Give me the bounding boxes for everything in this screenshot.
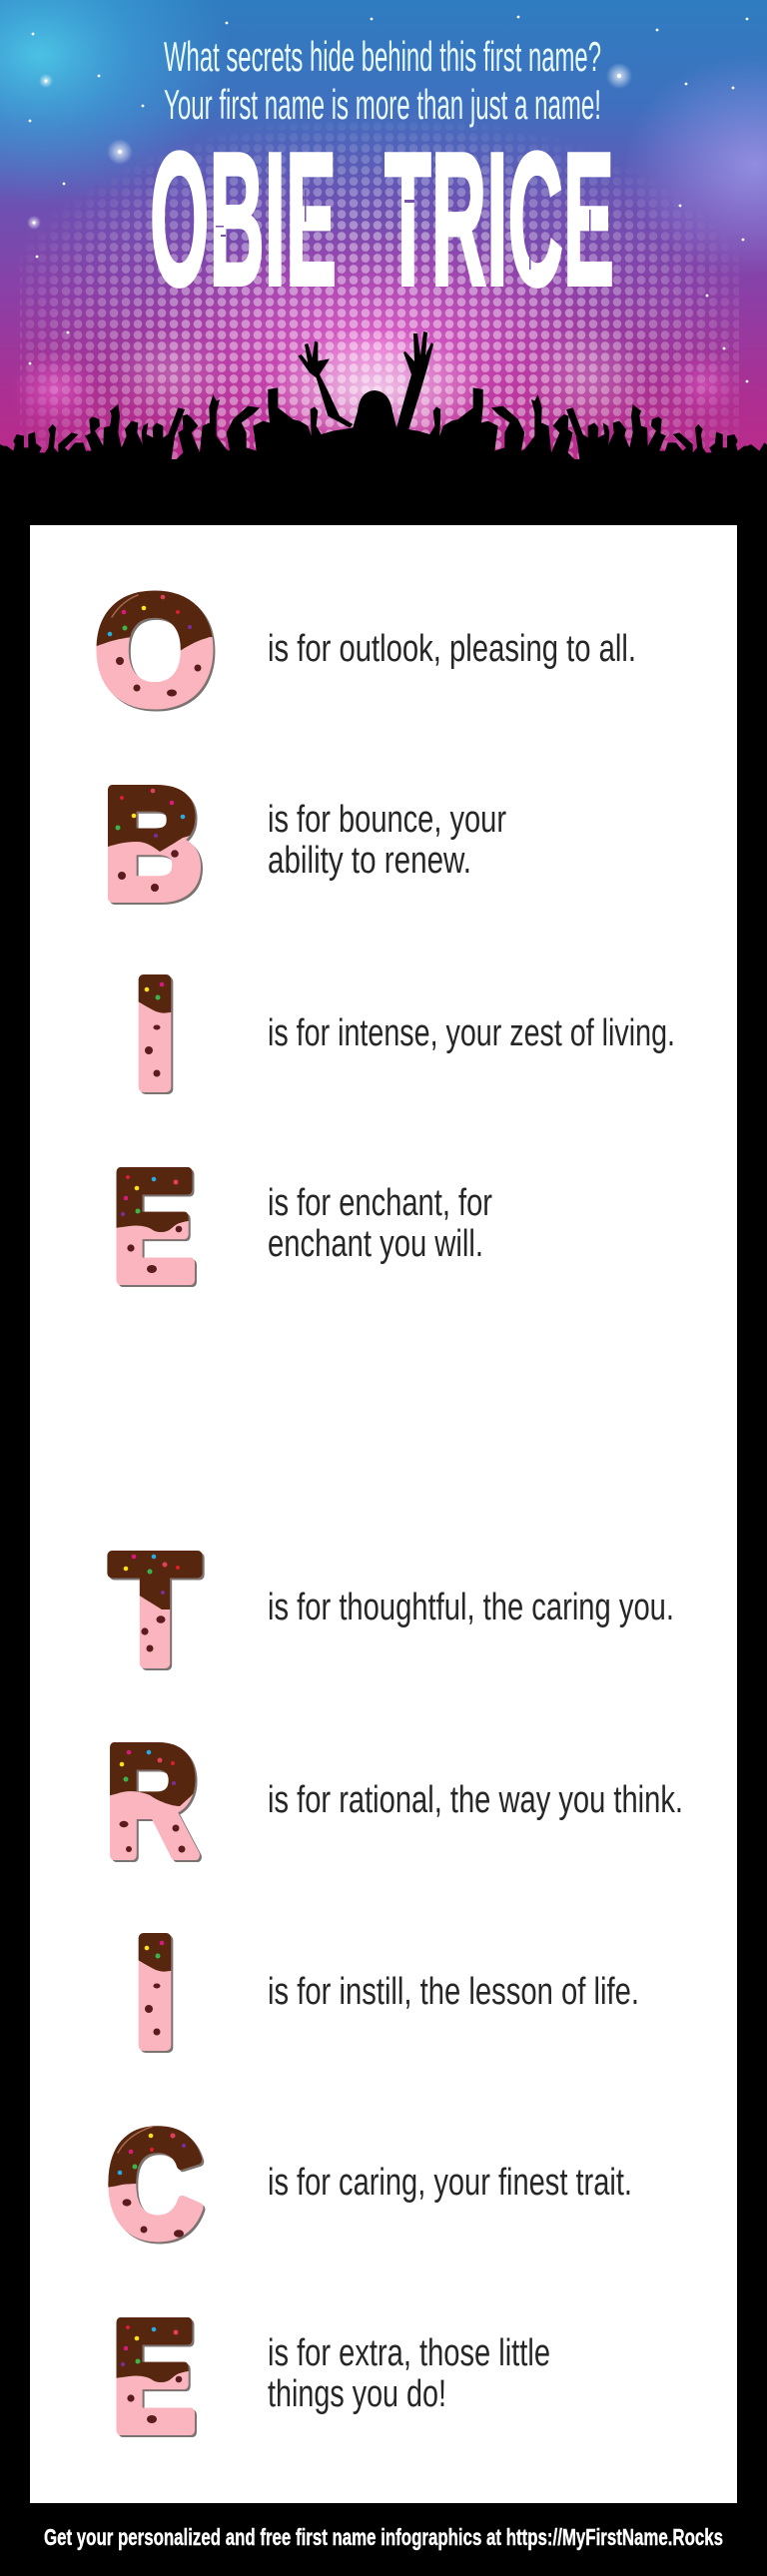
text: E lines: is for extra, those little: [268, 2332, 550, 2374]
icon: chocolate letter I: I: [133, 947, 177, 1121]
central figure head and hair: [350, 390, 399, 439]
icon: chocolate letter B: B: [105, 759, 205, 934]
icon: chocolate letter R: [110, 1742, 202, 1862]
icon: chocolate letter E: E: [114, 2291, 198, 2466]
row: I (second): [133, 1905, 639, 2082]
icon: chocolate letter I: I: [135, 949, 179, 1123]
icon: chocolate letter O: O: [95, 564, 215, 736]
icon: chocolate letter R: R: [106, 1714, 198, 1889]
icon: chocolate letter E: [116, 2317, 197, 2437]
icon: chocolate letter R: R: [106, 1714, 198, 1889]
icon: chocolate letter I: I: [133, 1905, 177, 2080]
icon: chocolate letter T: T: [110, 1523, 200, 1697]
icon: chocolate letter B: [108, 785, 203, 905]
icon: chocolate letter R: R: [108, 1716, 200, 1891]
icon: chocolate letter E: E: [114, 1141, 198, 1316]
icon: chocolate letter E: E: [112, 2289, 196, 2464]
icon: chocolate letter E: E: [112, 2289, 196, 2464]
icon: chocolate letter O: [96, 591, 216, 711]
icon: chocolate letter B: B: [103, 757, 203, 932]
text: O line: is for outlook, pleasing to all.: [268, 628, 636, 670]
icon: chocolate letter C: C: [107, 2100, 203, 2267]
row: O: [96, 591, 633, 711]
row: T: [110, 1523, 674, 1699]
icon: chocolate letter E: [116, 1167, 197, 1287]
text: E lines: [268, 2332, 550, 2415]
icon: chocolate letter I: I: [133, 947, 177, 1121]
icon: chocolate letter C: C: [109, 2102, 205, 2269]
icon: chocolate letter O: O: [95, 564, 215, 736]
icon: chocolate letter C: C: [107, 2100, 203, 2267]
icon: chocolate letter I: [138, 1933, 174, 2053]
icon: chocolate letter I: I: [133, 1905, 177, 2080]
icon: chocolate letter O: O: [97, 566, 217, 738]
icon: chocolate letter T: T: [112, 1525, 202, 1699]
text: C line: is for caring, your finest trait.: [268, 2162, 632, 2204]
central figure right arm: [395, 331, 433, 433]
header banner: [0, 0, 767, 459]
text: E lines: [268, 1182, 492, 1265]
text: B lines: [268, 799, 506, 882]
icon: chocolate letter T: [107, 1551, 205, 1670]
icon: chocolate letter E: E: [112, 1139, 196, 1314]
crowd right side: [369, 387, 767, 532]
row: E: [116, 1167, 491, 1287]
icon: chocolate letter C: [108, 2126, 206, 2245]
icon: chocolate letter T: T: [110, 1523, 200, 1697]
row: E (second): [116, 2317, 549, 2437]
title distress marks: [216, 190, 591, 270]
text: E lines: things you do!: [268, 2373, 446, 2415]
central figure left arm: [298, 341, 353, 427]
text: B lines: is for bounce, your: [268, 799, 506, 841]
row: R: [106, 1714, 683, 1891]
header text: two tagline lines: [164, 33, 601, 128]
icon: chocolate letter B: B: [103, 757, 203, 932]
row: I: [133, 947, 675, 1123]
title: name: OBIE: [150, 114, 337, 325]
crowd silhouette: [0, 331, 767, 532]
white content panel: [30, 525, 737, 2503]
icon: chocolate letter E: E: [112, 1139, 196, 1314]
row: C: [108, 2126, 629, 2245]
text: E lines: enchant you will.: [268, 1223, 483, 1265]
text: E lines: is for enchant, for: [268, 1182, 492, 1224]
icon: chocolate letter I: I: [135, 1907, 179, 2082]
text: I line: is for instill, the lesson of life.: [268, 1971, 639, 2013]
icon: chocolate letter I: [138, 974, 174, 1094]
row: B: [108, 785, 506, 905]
sparkles: [27, 16, 748, 382]
text: B lines: ability to renew.: [268, 840, 471, 882]
